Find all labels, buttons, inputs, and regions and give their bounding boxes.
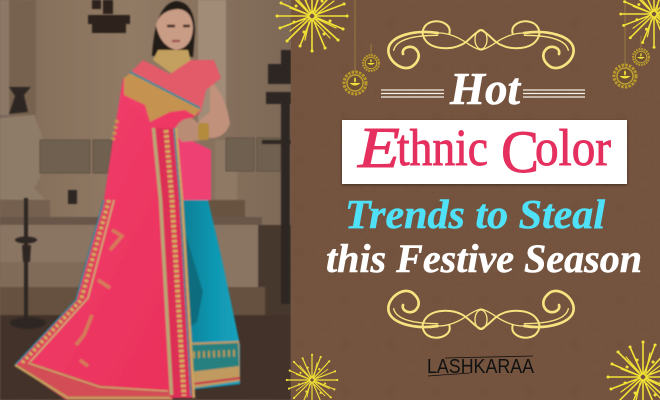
heading box: Ethnic Color: olor [535, 120, 611, 177]
woman [15, 1, 240, 400]
heading: this Festive Season: this Festive Season [326, 236, 642, 281]
icon: diya right small [633, 49, 649, 65]
drape [104, 78, 200, 200]
steps and floor [0, 200, 291, 400]
hair [152, 1, 195, 57]
pallu [15, 95, 172, 400]
pleats [176, 133, 211, 200]
hands and bangle [174, 118, 204, 142]
pillars [0, 0, 237, 212]
heading: Hot [381, 63, 585, 114]
icon: firework top left [277, 0, 347, 51]
icon: firework bottom left [287, 355, 337, 400]
face [156, 9, 193, 50]
pallu sprigs [76, 230, 122, 366]
ornament bottom [388, 291, 574, 338]
eyes and mouth [167, 25, 190, 27]
blouse [128, 60, 221, 112]
side lamps [9, 50, 291, 329]
panel: brown title background [277, 0, 660, 400]
heading box: Ethnic Color: C [501, 119, 539, 185]
icon: diya right large [614, 65, 636, 87]
frieze panels [40, 138, 281, 173]
hanging lamp [88, 0, 130, 33]
icon: firework bottom right [608, 342, 660, 400]
hem border [15, 362, 173, 400]
icon: diya left small [363, 55, 379, 71]
vertical border [152, 128, 195, 398]
logo: Lashkaraa: LASHKARAA [427, 356, 535, 378]
heading box: Ethnic Color: thnic [397, 120, 488, 177]
hanging strings [355, 0, 641, 72]
teal skirt [176, 200, 240, 390]
necklace [153, 50, 191, 74]
icon: diya left large [344, 72, 366, 94]
arm [195, 80, 230, 138]
heading: Trends to Steal: Trends to Steal [345, 191, 606, 237]
wall background [0, 0, 291, 400]
stripes [381, 90, 585, 97]
heading box: Ethnic Color: E [357, 115, 400, 180]
teal hem [186, 341, 240, 388]
embroidery [124, 72, 201, 122]
heading: Hot: Hot [449, 63, 521, 114]
pallu side border [15, 200, 104, 365]
icon: firework top right [621, 0, 660, 47]
panel: saree photo [0, 0, 291, 400]
ornament top [388, 21, 574, 68]
heading box: Ethnic Color [342, 115, 627, 185]
